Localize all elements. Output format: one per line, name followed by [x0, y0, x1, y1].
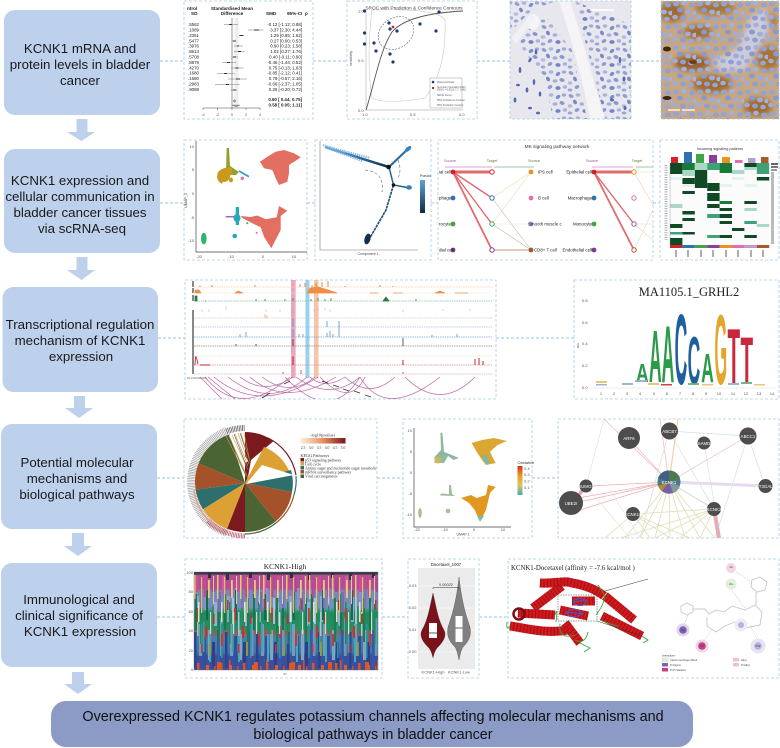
interaction legend: Interactions — [662, 654, 676, 658]
stacked composition — [194, 572, 378, 670]
panel: oxidative UMAP — [403, 419, 535, 538]
2D interaction diagram: TYR — [700, 646, 705, 648]
panel: molecular docking — [507, 559, 779, 678]
panel: GRHL2 sequence logo: 4 — [639, 391, 642, 396]
panel: GRHL2 sequence logo: 2 — [613, 391, 616, 396]
panel: gene interaction network: KCNK10 — [624, 512, 642, 517]
gene label ring — [191, 428, 245, 536]
panel: gene interaction network — [558, 419, 779, 538]
step 3: transcriptional regulation: Transcriptional regulation — [6, 317, 154, 332]
panel: pseudotime trajectory — [315, 140, 431, 260]
panel: immune stacked bars: 100 — [186, 570, 194, 575]
panel: forest plot: 1.02 [0.27; 1.76] — [270, 49, 302, 54]
panel: forest plot: ntrol — [187, 6, 197, 11]
panel: forest plot: 0 — [231, 112, 234, 117]
panel: UMAP clusters — [184, 140, 307, 260]
step 5: immunological significance: KCNK1 expression — [24, 624, 136, 639]
2D interaction diagram: VAL — [729, 583, 734, 586]
panel: MK signaling network: Smooth muscle c — [528, 222, 562, 226]
panel: forest plot: 1.29 [0.95; 1.62] — [270, 33, 302, 38]
panel: GRHL2 sequence logo: Bits — [576, 342, 580, 348]
conclusion banner — [51, 701, 693, 747]
arrow: step 4 to 5 — [64, 533, 92, 556]
panel: immune stacked bars: 40 — [189, 628, 194, 633]
panel: MK signaling network: B cell — [538, 196, 549, 200]
panel: SROC curve — [347, 1, 477, 119]
orange peaks — [200, 281, 393, 287]
panel: KEGG chord diagram: mRNA surveillance pathway — [305, 469, 351, 474]
panel: oxidative UMAP: 0.2 — [524, 478, 530, 484]
step 3: transcriptional regulation: mechanism of KCNK1 — [15, 333, 145, 348]
step 4: molecular mechanisms: biological pathways — [19, 487, 135, 502]
panel: forest plot: -0.12 [-1.12; 0.88] — [267, 22, 302, 27]
panel: forest plot: .3976 — [188, 44, 200, 49]
panel: oxidative UMAP: 10 — [408, 428, 413, 433]
panel: immune stacked bars — [185, 559, 382, 678]
panel: pseudotime trajectory: Pseudo — [420, 174, 431, 178]
panel: MK signaling network: Source — [586, 159, 598, 163]
logo letters: C — [675, 295, 687, 406]
panel: forest plot: 0.75 [-0.13; 1.63] — [269, 65, 302, 70]
panel: ATAC and Hi-C tracks: chr1:233,000,000 — [187, 377, 207, 380]
panel: gene interaction network: KCNK3 — [707, 507, 722, 512]
step 2: scRNA-seq: via scRNA-seq — [38, 221, 126, 236]
KCNK1 hub — [658, 470, 680, 494]
panel: forest plot: SMD — [266, 11, 277, 16]
panel: UMAP clusters: 10 — [292, 254, 297, 259]
panel: SROC curve: SENS = 0.83 [0.71 - 0.90] — [437, 88, 466, 92]
step 1: mRNA and protein levels: cancer — [60, 73, 101, 88]
panel: KEGG chord diagram: p53 signaling pathway — [305, 457, 341, 462]
chord wedges — [195, 432, 294, 532]
panel: forest plot: .5708 — [188, 54, 200, 60]
step 1: mRNA and protein levels: KCNK1 mRNA and — [24, 41, 136, 56]
step 5: immunological significance: clinical significance of — [15, 608, 143, 623]
panel: MK signaling network: phage — [439, 196, 452, 200]
panel: MK signaling network: rocyte — [439, 222, 452, 226]
step 4: molecular mechanisms: Potential molecular — [20, 455, 134, 470]
panel: UMAP clusters: -5 — [190, 215, 195, 220]
panel: MK signaling network: Source — [528, 159, 540, 163]
panel: SROC curve: 0.0 — [459, 112, 465, 117]
interaction legend: Carbon Hydrogen Bond — [670, 658, 698, 662]
interaction legend: Alkyl — [741, 658, 747, 662]
panel: ATAC and Hi-C tracks — [185, 280, 496, 401]
panel: forest plot: 0.40 [-0.11; 0.90] — [269, 54, 302, 60]
panel: SROC curve: Observed Data — [437, 81, 454, 84]
panel: docetaxel violin plot: KCNK1-Low — [448, 670, 470, 674]
panel: forest plot: 3.37 [2.30; 4.44] — [270, 28, 302, 32]
edges — [572, 419, 765, 538]
interaction legend — [662, 654, 750, 672]
panel: pseudotime trajectory: Component 1 — [357, 252, 379, 256]
panel: immune stacked bars: KCNK1-High — [264, 562, 306, 571]
panel: forest plot: 2 — [245, 112, 248, 117]
step 3: transcriptional regulation: expression — [49, 349, 113, 364]
panel: oxidative UMAP: 0.4 — [524, 466, 530, 471]
panel: SROC curve: 0.0 — [358, 108, 364, 113]
panel: forest plot: 0.27 [0.00; 0.53] — [270, 38, 302, 43]
panel: gene interaction network: ABCC1 — [741, 434, 756, 439]
panel: UMAP clusters: -10 — [228, 254, 235, 259]
panel: MK signaling network — [438, 140, 653, 260]
panel: GRHL2 sequence logo: 0.4 — [582, 341, 588, 346]
panel: forest plot: .2983 — [188, 82, 200, 86]
panel: docetaxel violin plot — [408, 559, 479, 678]
step 4: molecular mechanisms: mechanisms and — [27, 471, 127, 486]
loop arcs — [200, 377, 475, 401]
panel: GRHL2 sequence logo: 12 — [744, 391, 749, 396]
panel: forest plot: .1089 — [188, 28, 200, 32]
panel: docetaxel violin plot: 0.02 — [409, 605, 417, 610]
panel: MK signaling network: Endothelial cell — [562, 248, 592, 252]
panel: KEGG chord diagram: 4.5 — [333, 446, 337, 450]
panel: forest plot: 0.58 [ 0.05; 1.11] — [269, 102, 303, 108]
panel: immune stacked bars: 0 — [191, 667, 194, 672]
step 2: scRNA-seq: cellular communication in — [5, 189, 155, 204]
panel: forest plot: .4270 — [188, 65, 200, 70]
panel: forest plot: -0.66 [-2.37; 1.05] — [267, 82, 302, 86]
panel: gene interaction network: UBE2I — [565, 501, 577, 506]
panel: forest plot: .2351 — [188, 33, 200, 38]
signal peaks — [265, 309, 293, 318]
panel: MK signaling network: Target — [632, 159, 643, 163]
panel: immune stacked bars: 80 — [189, 589, 194, 594]
panel: forest plot: .9088 — [188, 87, 200, 92]
step 5: immunological significance — [1, 563, 157, 667]
violin: KCNK1-Low — [448, 577, 470, 660]
panel: docetaxel violin plot: KCNK1-High — [422, 670, 444, 674]
panel: SROC curve: 1.0 — [358, 8, 364, 14]
protein helices — [507, 582, 648, 652]
step 4: molecular mechanisms — [1, 424, 157, 529]
panel: IHC high expression — [660, 1, 780, 119]
panel: SROC curve: 95% Confidence Contour — [437, 99, 465, 102]
panel: SROC curve: SROC with Prediction & Confidence Contours — [365, 6, 463, 12]
2D interaction diagram — [676, 563, 767, 654]
fan of ribbons — [226, 433, 250, 478]
arrow: step 5 to conclusion — [64, 672, 92, 694]
panel: MK signaling network: iPS cell — [538, 170, 553, 174]
panel: forest plot: -0.46 [-1.44; 0.52] — [267, 60, 302, 65]
logo letters: T — [728, 313, 740, 401]
panel: molecular docking: KCNK1-Docetaxel (affinity = -7.6 kcal/mol ) — [511, 565, 635, 572]
logo letters: A — [636, 359, 649, 388]
panel: oxidative UMAP: -10 — [406, 512, 413, 517]
2D interaction diagram: LEU — [681, 630, 686, 632]
panel: KEGG chord diagram: 5.0 — [341, 446, 345, 450]
panel: oxidative UMAP: 10 — [501, 527, 506, 532]
highlighted regions — [291, 280, 318, 378]
panel: GRHL2 sequence logo: 7 — [679, 391, 682, 396]
logo letters: C — [688, 322, 700, 399]
panel: GRHL2 sequence logo: 5 — [653, 391, 656, 396]
step 5: immunological significance: Immunological and — [23, 592, 135, 607]
panel: forest plot: .1680 — [188, 71, 200, 76]
cluster: lymphoid — [201, 207, 258, 244]
panel: oxidative UMAP: 0 — [410, 470, 413, 475]
interaction legend: Pi-Pi Stacked — [670, 668, 686, 672]
panel: docetaxel violin plot: 0.00 — [409, 649, 417, 654]
significance bracket: 0.00022 — [439, 583, 453, 587]
panel: GRHL2 sequence logo: 8 — [692, 391, 695, 396]
panel: KEGG chord diagram: Viral carcinogenesis — [305, 474, 338, 479]
panel: MK signaling network: MK signaling pathway network — [525, 144, 590, 150]
panel: UMAP clusters: -10 — [188, 238, 195, 243]
panel: forest plot: 0.26 [-0.20; 0.72] — [269, 87, 302, 92]
panel: SROC curve: SROC Curve — [437, 94, 452, 97]
panel: KEGG chord diagram: KEGG Pathways — [300, 453, 330, 458]
panel: GRHL2 sequence logo: 0.2 — [582, 363, 588, 368]
panel: gene interaction network: KCNK1 — [662, 480, 677, 485]
panel: GRHL2 sequence logo: 14 — [770, 391, 775, 396]
arrow: step 1 to 2 — [67, 119, 95, 141]
panel: forest plot: 0.79 [-0.57; 2.16] — [269, 76, 302, 81]
panel: GRHL2 sequence logo: 0.6 — [582, 320, 588, 325]
panel: MK signaling network: Target — [487, 159, 498, 163]
panel: MK signaling network: dial cell — [439, 248, 454, 252]
logo letters: A — [662, 310, 674, 400]
panel: SROC curve: 95% Prediction Contour — [437, 104, 464, 107]
panel: KEGG chord diagram: Amino sugar and nucleotide sugar metabolis — [305, 465, 377, 470]
network lines — [453, 172, 653, 250]
panel: GRHL2 sequence logo: 6 — [666, 391, 669, 396]
panel: MK signaling network: Source — [444, 159, 456, 163]
step 1: mRNA and protein levels: protein levels in bladder — [10, 57, 151, 72]
panel: GRHL2 sequence logo — [574, 280, 779, 406]
panel: UMAP clusters: 0 — [262, 254, 265, 259]
step 3: transcriptional regulation — [2, 287, 158, 392]
panel: forest plot: .8613 — [188, 49, 200, 54]
zoom box and leader lines — [558, 579, 648, 636]
step 2: scRNA-seq — [4, 149, 160, 253]
connectors between steps and panels — [157, 61, 661, 617]
interaction legend: Pi-Alkyl — [741, 663, 750, 667]
panel: MK signaling network: Epithelial cell — [566, 170, 592, 174]
panel: oxidative UMAP: Oxidative — [518, 460, 535, 465]
panel: docetaxel violin plot: Docetaxel_1007 — [431, 562, 462, 567]
panel: gene interaction network: ARF6 — [623, 436, 635, 441]
panel: UMAP clusters: -20 — [196, 254, 203, 259]
panel: immune stacked bars: ID — [284, 672, 287, 676]
panel: MK signaling network: Monocyte — [573, 222, 593, 226]
interaction legend: Pi-Sigma — [670, 663, 681, 667]
track baselines — [194, 287, 492, 374]
panel: SROC curve: 0.5 — [358, 58, 364, 63]
panel: oxidative UMAP: UMAP 1 — [457, 532, 470, 536]
panel: UMAP clusters: UMAP_2 — [184, 193, 188, 208]
panel: immune stacked bars: 20 — [189, 648, 194, 653]
logo letters: A — [701, 344, 714, 391]
panel: GRHL2 sequence logo: 9 — [705, 391, 708, 396]
nodes — [559, 422, 772, 521]
panel: forest plot: Difference — [221, 11, 244, 16]
panel: IHC low expression — [510, 1, 631, 119]
panel: KEGG chord diagram — [184, 419, 377, 538]
panel: MK signaling network: ial cell — [439, 170, 451, 174]
cluster: myeloid — [217, 148, 249, 184]
panel: incoming signaling heatmap: Incoming signaling patterns — [697, 147, 743, 151]
panel: UMAP clusters: 10 — [190, 144, 195, 149]
panel: GRHL2 sequence logo: 3 — [626, 391, 629, 396]
panel: SROC curve: Summary Operating Point — [437, 86, 466, 89]
logo letters — [636, 295, 753, 406]
panel: UMAP clusters: 5 — [192, 167, 195, 172]
cluster: malignant upper — [260, 150, 301, 185]
legend: -log10(pvalue) — [310, 432, 336, 438]
panel: GRHL2 sequence logo: MA1105.1_GRHL2 — [639, 285, 739, 299]
panel: forest plot: p — [305, 11, 308, 16]
panel: forest plot: -2 — [216, 112, 220, 117]
panel: KEGG chord diagram: 4.0 — [325, 446, 329, 450]
panel: KEGG chord diagram: 3.5 — [317, 446, 321, 450]
panel: forest plot: .1680 — [188, 76, 200, 81]
panel: gene interaction network: ST3GAL5 — [756, 484, 776, 489]
step 2: scRNA-seq: bladder cancer tissues — [13, 205, 147, 220]
cluster: malignant lower — [241, 206, 287, 248]
panel: KEGG chord diagram: Cell cycle — [305, 461, 321, 466]
panel: MK signaling network: CD8+ T cell — [534, 248, 557, 252]
panel: GRHL2 sequence logo: 0.8 — [582, 298, 588, 303]
logo letters: A — [649, 316, 662, 399]
panel: oxidative UMAP: -20 — [414, 527, 421, 532]
panel: oxidative UMAP: -10 — [442, 527, 449, 532]
panel: oxidative UMAP: 0.1 — [524, 485, 530, 490]
panel: oxidative UMAP: -5 — [408, 491, 413, 496]
panel: GRHL2 sequence logo: 0.0 — [582, 385, 588, 390]
conclusion banner: Overexpressed KCNK1 regulates potassium channels affecting molecular mechanisms and — [82, 709, 664, 725]
panel: GRHL2 sequence logo: 10 — [717, 391, 722, 396]
panel: forest plot: SD — [191, 11, 198, 16]
panel: forest plot: 95%-CI — [287, 11, 302, 16]
panel: forest plot: 0.90 [0.23; 1.58] — [270, 44, 302, 49]
cell type strip — [670, 245, 769, 248]
2D interaction diagram: PHE — [756, 646, 761, 648]
panel: MK signaling network: Macrophage — [568, 196, 593, 200]
logo letters: T — [741, 325, 753, 398]
panel: forest plot: .5562 — [188, 22, 200, 27]
panel: forest plot: Standardised Mean — [211, 6, 253, 11]
2D interaction diagram: ILE — [729, 567, 733, 569]
panel: forest plot: -0.85 [-2.12; 0.41] — [267, 71, 302, 76]
panel: KEGG chord diagram: 3.0 — [309, 446, 313, 450]
panel: oxidative UMAP: 0.3 — [524, 472, 530, 477]
bar summary — [671, 152, 768, 163]
panel: gene interaction network: SAMD — [698, 441, 710, 446]
panel: gene interaction network: SUMO1 — [578, 484, 594, 489]
logo letters: G — [714, 296, 727, 406]
panel: incoming signaling heatmap — [660, 140, 779, 260]
panel: GRHL2 sequence logo: 13 — [757, 391, 762, 396]
step 2: scRNA-seq: KCNK1 expression and — [11, 173, 149, 188]
panel: GRHL2 sequence logo: 11 — [731, 391, 736, 396]
panel: KEGG chord diagram: 2.5 — [301, 446, 305, 450]
panel: SROC curve: sensitivity — [349, 51, 353, 66]
panel: oxidative UMAP: 0 — [473, 527, 476, 532]
cells — [418, 433, 507, 522]
panel: UMAP clusters: 0 — [192, 191, 195, 196]
panel: docetaxel violin plot: 0.03 — [409, 583, 417, 588]
step 1: mRNA and protein levels — [4, 10, 160, 115]
arrow: step 3 to 4 — [65, 396, 93, 418]
panel: immune stacked bars: 60 — [189, 609, 194, 614]
panel: forest plot: .8879 — [188, 60, 200, 65]
panel: forest plot — [184, 1, 313, 119]
arrow: step 2 to 3 — [67, 257, 95, 280]
panel: GRHL2 sequence logo: 1 — [600, 391, 603, 396]
ligand — [566, 598, 587, 616]
panel: forest plot: -4 — [201, 112, 206, 117]
panel: docetaxel violin plot: 0.01 — [409, 627, 417, 632]
panel: gene interaction network: ABCB7 — [662, 429, 677, 434]
conclusion banner: biological pathways in bladder cancer — [253, 727, 493, 743]
panel: oxidative UMAP: 5 — [410, 449, 413, 454]
heatmap cells — [670, 163, 769, 245]
panel: SROC curve: 0.5 — [410, 112, 416, 117]
panel: forest plot: 0.60 [ 0.44; 0.75] — [268, 97, 303, 102]
violin: KCNK1-High — [421, 593, 445, 658]
panel: SROC curve: 1.0 — [362, 112, 368, 117]
panel: forest plot: 4 — [259, 112, 262, 117]
panel: forest plot: .5477 — [188, 38, 200, 43]
small logo letters — [596, 380, 765, 386]
